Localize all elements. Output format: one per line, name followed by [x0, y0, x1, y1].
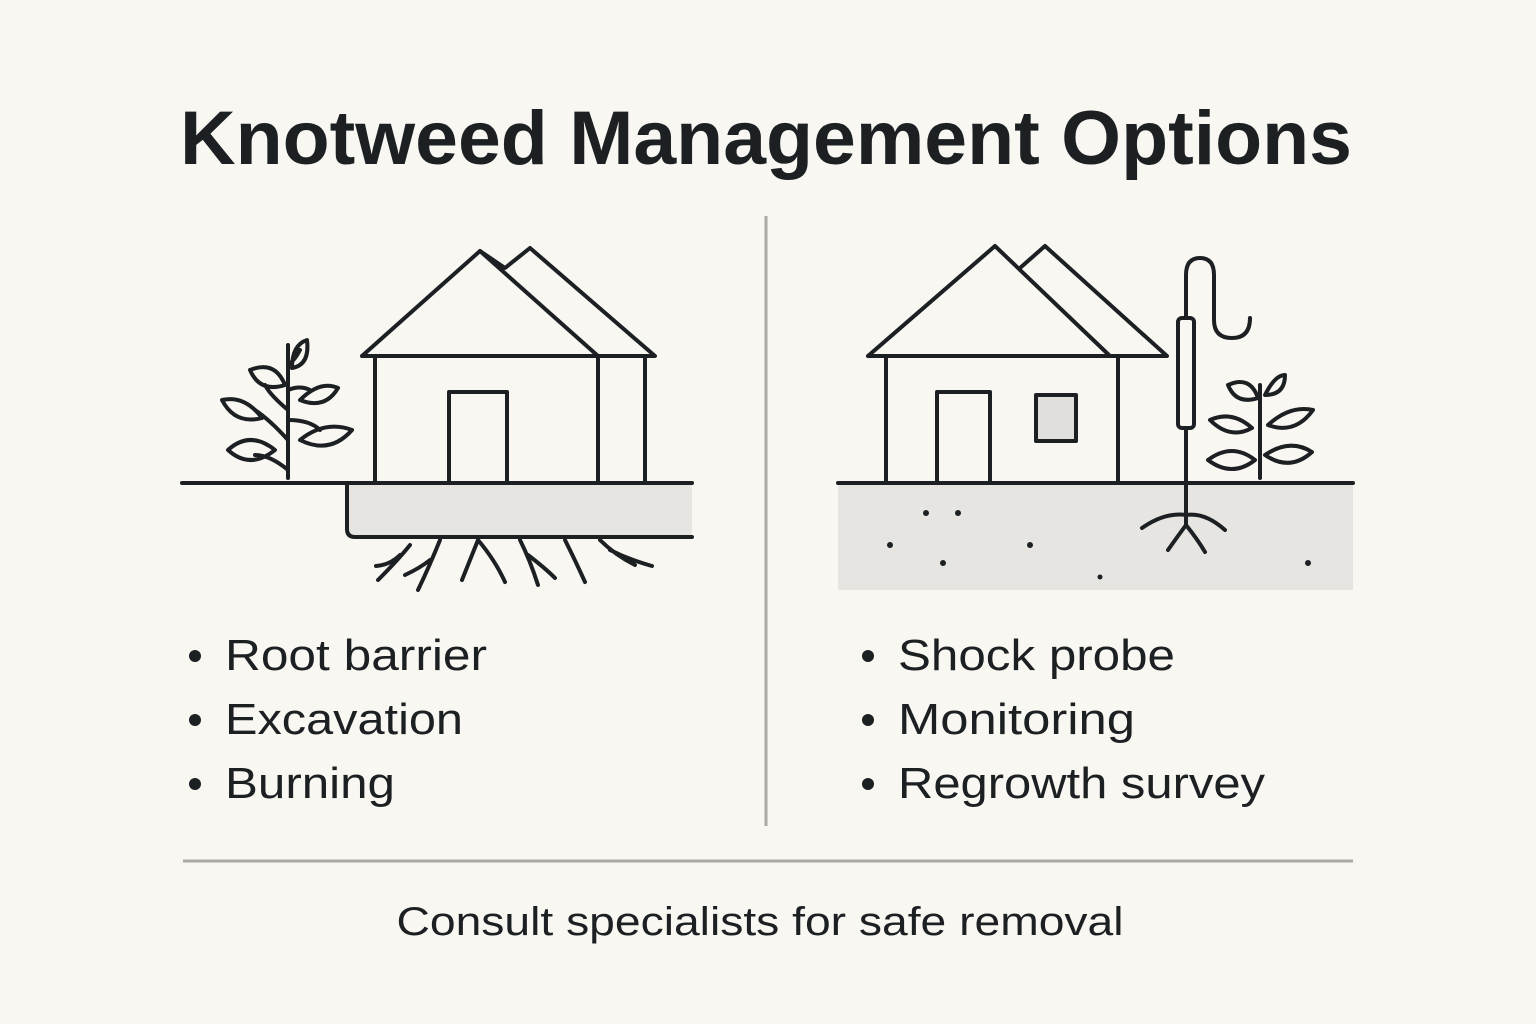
plant	[286, 345, 290, 478]
plant	[1258, 385, 1262, 478]
roots	[376, 540, 652, 590]
right bullet list: Shock probe	[898, 631, 1175, 680]
illustration: left root barrier house	[182, 248, 692, 590]
left bullet list: Root barrier	[225, 631, 487, 680]
soil dots	[887, 510, 1311, 580]
illustration: right shock probe house	[838, 246, 1353, 590]
right bullet list: Regrowth survey	[898, 759, 1265, 808]
left bullet list: Burning	[225, 759, 395, 808]
right bullet list	[862, 631, 1265, 808]
footer note: Consult specialists for safe removal	[396, 900, 1124, 944]
left bullet list: Excavation	[225, 695, 463, 744]
right bullet list: Monitoring	[898, 695, 1135, 744]
probe	[1184, 430, 1188, 525]
vertical divider	[764, 216, 768, 826]
left bullet list	[189, 631, 487, 808]
title: Knotweed Management Options	[180, 96, 1352, 181]
